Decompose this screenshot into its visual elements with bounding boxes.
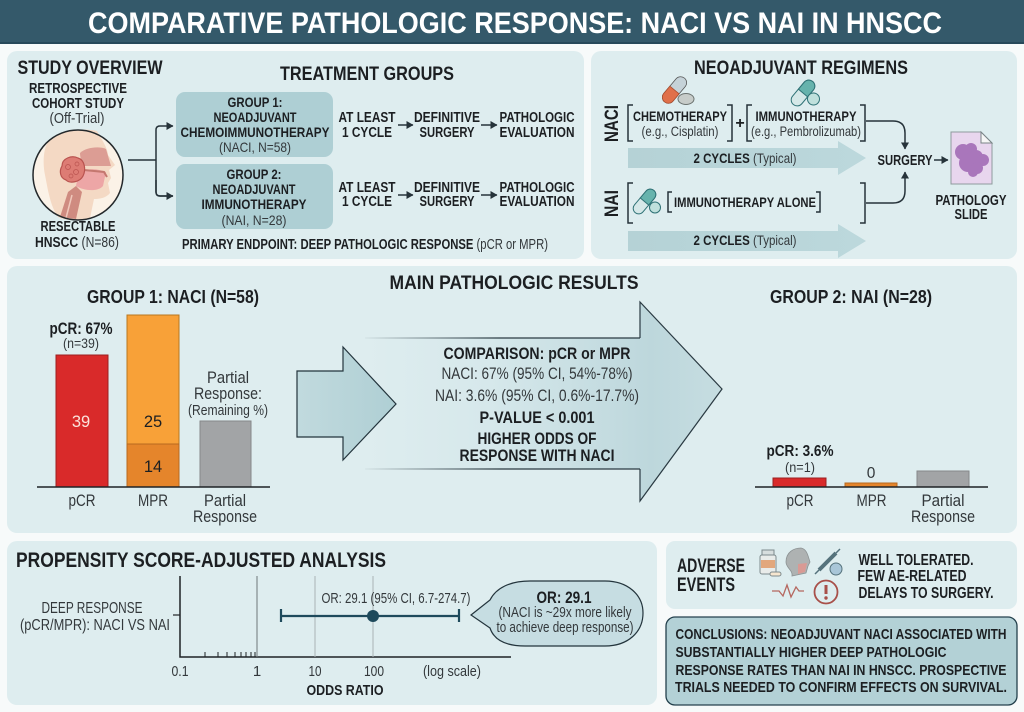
chart: group 2 NAI bars: pCR bbox=[786, 492, 814, 510]
bracket: immunotherapy: (e.g., Pembrolizumab) bbox=[751, 123, 861, 139]
label: resectable HNSCC: HNSCC (N=86) bbox=[35, 235, 119, 251]
box: group 1: NEOADJUVANT bbox=[214, 109, 297, 125]
flow: group 2 pathway: DEFINITIVE bbox=[414, 180, 480, 196]
bracket: chemotherapy: CHEMOTHERAPY bbox=[633, 108, 728, 124]
bracket: immunotherapy bbox=[747, 105, 865, 141]
chart: forest plot: ODDS RATIO bbox=[306, 682, 384, 699]
panel: conclusions: SUBSTANTIALLY HIGHER DEEP PATHOLOGIC bbox=[676, 644, 947, 661]
chart: group 1 NACI bars: Partial bbox=[207, 369, 249, 387]
chart: forest plot: (log scale) bbox=[423, 663, 481, 680]
icon: syringe bbox=[815, 549, 842, 575]
label: NAI: NAI bbox=[602, 190, 623, 217]
chart: group 1 NACI bars: Response: bbox=[194, 385, 262, 403]
icon: immunotherapy pill and tablet bbox=[789, 78, 820, 108]
study design text: COHORT STUDY bbox=[32, 96, 124, 112]
chart: group 1 NACI bars: 25 bbox=[144, 413, 162, 431]
chart: forest plot: 1 bbox=[253, 663, 261, 680]
icon: NAI pill and tablet bbox=[631, 187, 660, 216]
flow: group 1 pathway: AT LEAST bbox=[338, 110, 396, 126]
bracket: immunotherapy alone: IMMUNOTHERAPY ALONE bbox=[674, 194, 816, 210]
study design text: RETROSPECTIVE bbox=[29, 81, 127, 97]
label: surgery: SURGERY bbox=[878, 153, 933, 169]
heading: main pathologic results: MAIN PATHOLOGIC RESULTS bbox=[390, 272, 638, 294]
chart: group 2 NAI bars: (n=1) bbox=[785, 460, 815, 475]
flow: group 2 pathway bbox=[338, 180, 575, 210]
chart: group 2 NAI bars: GROUP 2: NAI (N=28) bbox=[770, 287, 932, 307]
flow: group 2 pathway: PATHOLOGIC bbox=[500, 180, 575, 196]
heading: neoadjuvant regimens: NEOADJUVANT REGIMENS bbox=[694, 57, 908, 79]
arrow: comparison summary bbox=[365, 302, 722, 501]
chart: group 1 NACI bars bbox=[37, 287, 270, 526]
primary endpoint: PRIMARY ENDPOINT: DEEP PATHOLOGIC RESPONSE (pCR or MPR) bbox=[182, 237, 548, 253]
label: pathology slide bbox=[936, 192, 1006, 223]
panel: study overview bbox=[7, 51, 584, 259]
chart: group 2 NAI bars: 0 bbox=[867, 465, 876, 482]
plus sign: + bbox=[735, 115, 745, 132]
header banner bbox=[0, 0, 1024, 44]
flow: group 1 pathway bbox=[338, 110, 575, 141]
arrow: NACI to surgery bbox=[866, 121, 905, 149]
bracket: NAI bbox=[628, 183, 865, 223]
arrow: NAI to surgery bbox=[866, 172, 905, 203]
chart: group 1 NACI bars: pCR: 67% bbox=[50, 320, 113, 338]
callout: odds ratio interpretation: to achieve deep response) bbox=[496, 620, 634, 636]
heading: propensity analysis: PROPENSITY SCORE-ADJUSTED ANALYSIS bbox=[16, 549, 386, 572]
arrow: NACI 2 cycles bbox=[628, 141, 866, 175]
box: group 1 bbox=[176, 92, 333, 157]
panel: adverse events bbox=[666, 541, 1017, 609]
arrow: surgery to slide bbox=[934, 159, 948, 161]
flow: group 2 pathway: 1 CYCLE bbox=[342, 194, 392, 210]
arrow: comparison summary: HIGHER ODDS OF bbox=[478, 429, 596, 448]
arrow: split into treatment groups bbox=[128, 126, 173, 196]
chart: group 2 NAI bars: pCR: 3.6% bbox=[766, 443, 834, 460]
chart: group 1 NACI bars: GROUP 1: NACI (N=58) bbox=[87, 287, 259, 307]
label: deep response row: (pCR/MPR): NACI VS NAI bbox=[20, 617, 170, 634]
arrow: comparison summary: NACI: 67% (95% CI, 54%-78%) bbox=[442, 364, 632, 383]
flow: group 2 pathway: EVALUATION bbox=[500, 194, 574, 210]
box: group 2: IMMUNOTHERAPY bbox=[202, 196, 307, 212]
arrow: small block arrow bbox=[297, 347, 396, 460]
text: tolerability: WELL TOLERATED. bbox=[858, 552, 974, 569]
arrow: comparison summary: P-VALUE < 0.001 bbox=[480, 408, 594, 427]
chart: group 1 NACI bars: 14 bbox=[144, 458, 162, 476]
arrow: NAI 2 cycles bbox=[628, 224, 866, 258]
icon: pathology slide bbox=[951, 132, 992, 184]
bracket: chemotherapy bbox=[628, 105, 732, 141]
panel: main pathologic results bbox=[7, 266, 1017, 533]
flow: group 1 pathway: SURGERY bbox=[420, 125, 475, 141]
flow: group 2 pathway: SURGERY bbox=[420, 194, 475, 210]
box: group 2 bbox=[176, 164, 333, 229]
box: group 1: (NACI, N=58) bbox=[219, 139, 291, 155]
chart: forest plot: OR: 29.1 (95% CI, 6.7-274.7) bbox=[322, 590, 470, 607]
bracket: chemotherapy: (e.g., Cisplatin) bbox=[642, 123, 718, 139]
heading: adverse events bbox=[677, 556, 745, 596]
chart: group 1 NACI bars: (Remaining %) bbox=[188, 402, 268, 419]
flow: group 1 pathway: PATHOLOGIC bbox=[500, 110, 575, 126]
box: group 2: (NAI, N=28) bbox=[222, 212, 286, 228]
chart: group 2 NAI bars: Response bbox=[911, 508, 975, 526]
title: COMPARATIVE PATHOLOGIC RESPONSE: NACI VS NAI IN HNSCC bbox=[88, 7, 942, 40]
heading: treatment groups: TREATMENT GROUPS bbox=[280, 63, 454, 85]
chart: group 2 NAI bars: MPR bbox=[856, 492, 887, 510]
label: deep response row bbox=[20, 600, 170, 634]
flow: group 1 pathway: 1 CYCLE bbox=[342, 125, 392, 141]
chart: forest plot: 100 bbox=[364, 663, 384, 680]
heading: adverse events: EVENTS bbox=[677, 575, 735, 596]
icon: head profile bbox=[786, 548, 810, 576]
flow: group 1 pathway: EVALUATION bbox=[500, 125, 574, 141]
label: resectable HNSCC: RESECTABLE bbox=[40, 219, 116, 235]
study design text: (Off-Trial) bbox=[50, 111, 104, 127]
text: tolerability: FEW AE-RELATED bbox=[858, 568, 966, 585]
chart: group 1 NACI bars: (n=39) bbox=[63, 335, 99, 351]
arrow: comparison summary: NAI: 3.6% (95% CI, 0.6%-17.7%) bbox=[435, 386, 639, 405]
callout: odds ratio interpretation: OR: 29.1 bbox=[536, 588, 592, 607]
flow: group 1 pathway: DEFINITIVE bbox=[414, 110, 480, 126]
panel: conclusions bbox=[666, 617, 1017, 705]
label: pathology slide: SLIDE bbox=[954, 206, 988, 223]
chart: forest plot: 10 bbox=[308, 663, 322, 680]
chart: forest plot: 0.1 bbox=[172, 663, 188, 680]
heading: adverse events: ADVERSE bbox=[677, 556, 745, 577]
icon: pulse line bbox=[772, 585, 804, 597]
box: group 2: GROUP 2: bbox=[226, 166, 282, 182]
icon: medicine bottle bbox=[760, 550, 781, 576]
arrow: comparison summary: RESPONSE WITH NACI bbox=[460, 446, 614, 465]
chart: group 1 NACI bars: MPR bbox=[138, 492, 168, 510]
box: group 1: GROUP 1: bbox=[228, 94, 282, 110]
panel: propensity score-adjusted analysis bbox=[7, 541, 657, 705]
box: group 1: CHEMOIMMUNOTHERAPY bbox=[180, 124, 330, 140]
flow: group 2 pathway: AT LEAST bbox=[338, 180, 396, 196]
chart: group 1 NACI bars: Response bbox=[193, 508, 257, 526]
panel: neoadjuvant regimens bbox=[591, 51, 1017, 259]
study design text bbox=[29, 81, 127, 127]
arrow: NACI 2 cycles: 2 CYCLES (Typical) bbox=[694, 150, 796, 166]
bracket: immunotherapy: IMMUNOTHERAPY bbox=[756, 108, 857, 124]
chart: group 2 NAI bars: Partial bbox=[922, 492, 964, 510]
label: NACI: NACI bbox=[602, 105, 623, 142]
chart: group 1 NACI bars: 39 bbox=[72, 413, 90, 431]
icon: head and neck anatomy with tumor bbox=[33, 130, 123, 220]
label: deep response row: DEEP RESPONSE bbox=[42, 600, 142, 617]
chart: group 2 NAI bars bbox=[755, 287, 988, 526]
icon: warning circle bbox=[814, 580, 838, 604]
callout: odds ratio interpretation: (NACI is ~29x more likely bbox=[498, 605, 632, 621]
box: group 2: NEOADJUVANT bbox=[212, 181, 296, 197]
chart: forest plot bbox=[172, 576, 511, 699]
arrow: comparison summary: COMPARISON: pCR or MPR bbox=[444, 344, 630, 363]
arrow: NAI 2 cycles: 2 CYCLES (Typical) bbox=[694, 232, 796, 248]
heading: study overview: STUDY OVERVIEW bbox=[18, 57, 163, 79]
callout: odds ratio interpretation bbox=[471, 581, 643, 646]
bracket: immunotherapy alone bbox=[668, 192, 820, 212]
label: resectable HNSCC bbox=[35, 219, 119, 251]
chart: group 1 NACI bars: pCR bbox=[68, 492, 96, 510]
text: tolerability bbox=[858, 552, 994, 602]
chart: group 1 NACI bars: Partial bbox=[204, 492, 246, 510]
icon: chemotherapy pill and tablet bbox=[660, 74, 694, 106]
